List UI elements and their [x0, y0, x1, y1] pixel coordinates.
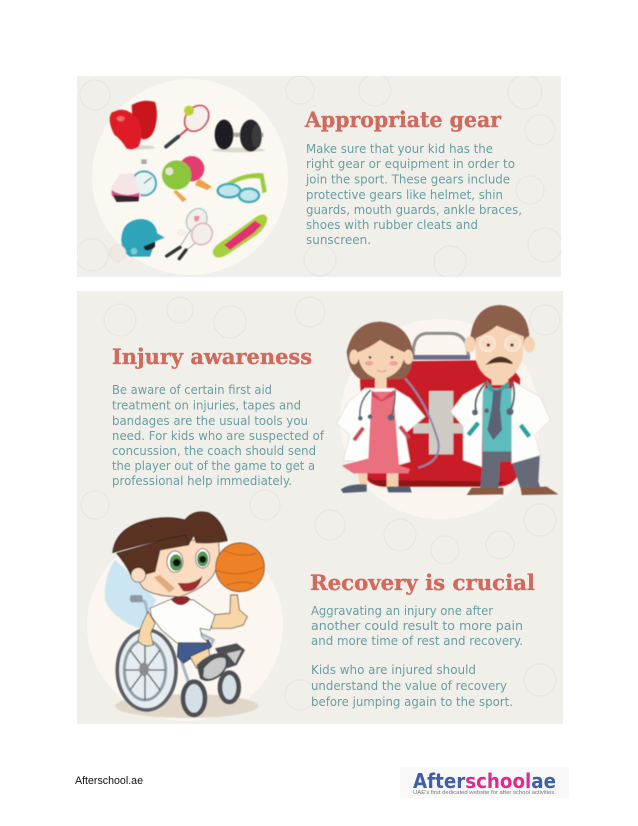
text block: gear description: [305, 141, 522, 247]
text block: recovery description: understand the value of recovery: [311, 678, 508, 693]
heading: injury awareness: Injury awareness: [112, 344, 312, 369]
doctors background circle: [340, 319, 540, 519]
figure: female doctor: [337, 322, 425, 493]
heading: recovery is crucial: Recovery is crucial: [310, 570, 535, 595]
text block: recovery description: Kids who are injured should: [311, 662, 476, 677]
text block: injury description: Be aware of certain first aid: [112, 382, 272, 397]
text block: gear description: join the sport. These gears include: [305, 172, 510, 186]
text block: recovery description: and more time of rest and recovery.: [311, 633, 523, 648]
icon: skateboard: [213, 215, 267, 258]
icon: swimming goggles: [218, 173, 267, 202]
icon: stethoscope tube: [405, 378, 439, 468]
text block: gear description: Make sure that your kid has the: [306, 141, 493, 156]
icon: badminton rackets: [167, 205, 216, 259]
icon: tennis racket: [166, 101, 214, 147]
illustration: boy in wheelchair with basketball: [105, 512, 264, 718]
gear icons: [109, 101, 267, 261]
heading: appropriate gear: Appropriate gear: [304, 107, 502, 132]
boy body: [138, 595, 247, 668]
text block: recovery description: Aggravating an injury one after: [311, 603, 494, 618]
footer: site name: Afterschool.ae: [75, 775, 143, 787]
head: [113, 512, 227, 597]
icon: ping pong paddles: [162, 156, 212, 202]
icon: first aid kit: [360, 333, 520, 487]
panel: appropriate gear: [76, 74, 562, 278]
wheelchair: [117, 595, 239, 715]
text block: injury description: professional help immediately.: [112, 473, 292, 488]
text block: injury description: the player out of the game to get a: [112, 458, 315, 473]
basketball: [216, 543, 264, 592]
logo wordmark: Afterschoolae: [413, 769, 556, 793]
icon: dumbbell: [212, 120, 265, 152]
text block: gear description: right gear or equipment in order to: [306, 156, 515, 171]
text block: gear description: guards, mouth guards, ankle braces,: [306, 202, 522, 217]
text block: injury description: concussion, the coach should send: [112, 443, 316, 458]
footer: afterschool logo: [400, 767, 569, 798]
text block: recovery description: before jumping again to the sport.: [311, 694, 513, 709]
recovery background circle: [87, 529, 283, 721]
text block: injury description: [112, 382, 325, 488]
logo tagline: UAE's first dedicated website for after school activities.: [413, 790, 556, 796]
text block: injury description: treatment on injuries, tapes and: [112, 398, 301, 412]
figure: male doctor: [451, 305, 558, 495]
blue backdrop: [105, 560, 157, 628]
ground shadow: [115, 694, 258, 718]
icon: boxing gloves: [110, 101, 157, 149]
text block: recovery description: another could result to more pain: [311, 618, 523, 633]
panel: injury awareness and recovery: [77, 291, 563, 724]
text block: gear description: protective gears like helmet, shin: [306, 187, 503, 202]
text block: injury description: bandages are the usual tools you: [112, 413, 308, 428]
text block: gear description: shoes with rubber cleats and: [306, 217, 478, 232]
gear background circle: [92, 79, 288, 275]
text block: recovery description: [311, 603, 523, 709]
shoes: [197, 643, 245, 681]
icon: shoe and stopwatch: [111, 159, 156, 202]
text block: gear description: sunscreen.: [306, 232, 371, 247]
text block: injury description: need. For kids who are suspected of: [112, 428, 325, 443]
illustration: doctors and first aid kit: [337, 305, 558, 495]
icon: baseball helmet: [109, 219, 165, 261]
